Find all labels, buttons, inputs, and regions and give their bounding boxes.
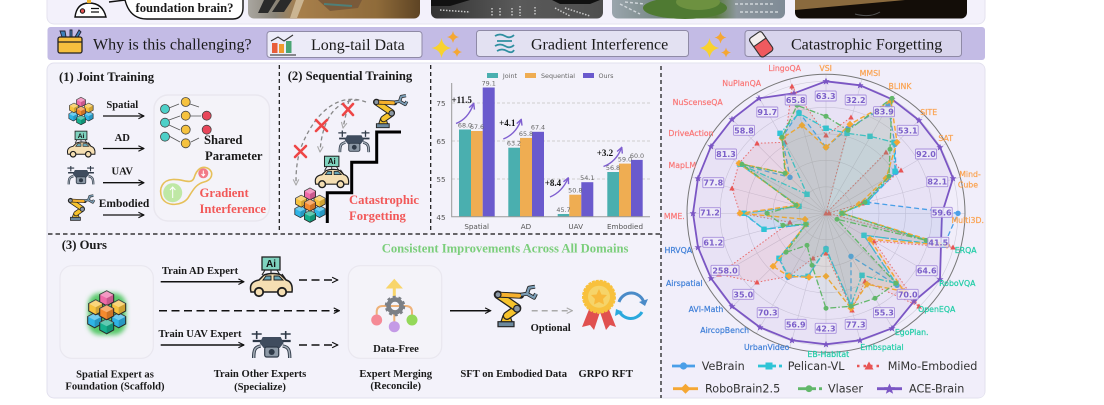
axis labels: VSI: [819, 64, 832, 73]
bar values: 65.8: [519, 130, 533, 138]
arrow: train AD expert: Train AD Expert: [162, 266, 239, 277]
heading: joint training: (1) Joint Training: [59, 70, 155, 84]
value labels: 59.6: [932, 208, 952, 217]
arrow to SFT: [450, 310, 491, 312]
radar legend: VeBrain: [702, 360, 745, 373]
dashed arrow: [299, 279, 338, 281]
optional dashed arrow: [531, 311, 572, 334]
value labels: 83.9: [874, 108, 894, 117]
middle dashed arrow: [159, 310, 339, 312]
bar values: 45.7: [556, 206, 571, 214]
icon: car: [250, 257, 292, 296]
axis labels: [664, 64, 984, 359]
optional dashed arrow: Optional: [531, 323, 571, 334]
step captions: Foundation (Scaffold): [65, 382, 165, 392]
axis labels: AircopBench: [700, 326, 749, 335]
shared parameter box: [154, 95, 270, 221]
axis labels: Embodied: [607, 222, 643, 231]
value labels: 70.0: [898, 290, 918, 299]
speech bubble: [109, 0, 243, 19]
photo: road scene: [431, 0, 603, 18]
step captions: Train Other Experts: [214, 369, 306, 380]
radar grid: [687, 74, 965, 352]
domain inputs: [67, 97, 95, 220]
value labels: [700, 91, 952, 333]
dashed arrow: [299, 344, 338, 346]
bars: [459, 88, 643, 217]
card: catastrophic forgetting: [745, 30, 962, 58]
arrows with domain labels: [99, 100, 150, 215]
radar legend: RoboBrain2.5: [705, 383, 780, 396]
bar values: 67.6: [470, 123, 484, 131]
forgetting arcs: [296, 99, 366, 185]
shared parameter label: Parameter: [205, 149, 263, 163]
value labels: 258.0: [712, 266, 738, 275]
axis labels: DriveAction: [668, 129, 714, 138]
step captions: [65, 369, 633, 393]
radar legend: Pelican-VL: [788, 360, 845, 373]
card: long-tail data: Long-tail Data: [311, 37, 405, 54]
series: Vlaser: [742, 98, 926, 308]
value labels: 58.8: [734, 126, 754, 135]
step captions: GRPO RFT: [578, 369, 633, 380]
bar values: 79.1: [482, 80, 496, 88]
axis labels: 65: [436, 137, 446, 146]
card: gradient interference: [476, 30, 688, 56]
radar legend: MiMo-Embodied: [888, 360, 977, 373]
value labels: 65.8: [786, 96, 806, 105]
value labels: 35.0: [733, 290, 754, 299]
catastrophic forgetting label: Forgetting: [349, 209, 407, 223]
value labels: 70.3: [758, 309, 778, 318]
step captions: (Reconcile): [370, 381, 421, 392]
bar chart: [436, 72, 650, 231]
improvement values: +11.5: [452, 95, 472, 105]
axis labels: Spatial: [464, 222, 489, 231]
bar values: [458, 80, 644, 214]
value labels: 82.1: [927, 178, 948, 187]
expert merging box: [348, 266, 442, 358]
improvement values: +8.4: [545, 178, 562, 188]
card: catastrophic forgetting: Catastrophic Forgetting: [791, 36, 942, 54]
icon: sparkles: [432, 31, 462, 58]
bar values: 59.0: [618, 156, 632, 164]
panel: sequential training: [288, 69, 419, 223]
series: Pelican-VL: [740, 113, 944, 305]
axis labels: LingoQA: [768, 64, 802, 73]
series: MiMo-Embodied: [719, 86, 953, 310]
icon: robot arm: [495, 287, 536, 327]
improvement arrows: [456, 104, 622, 197]
axis labels: MMSI: [860, 69, 880, 78]
axis labels: UrbanVideo: [744, 343, 790, 352]
arrows with domain labels: Embodied: [99, 198, 150, 210]
card: long-tail data: [267, 32, 422, 58]
series: RoboBrain2.5: [739, 101, 947, 308]
value labels: 32.2: [846, 96, 866, 105]
radar panel background: [661, 64, 984, 398]
arrows with domain labels: Spatial: [106, 100, 138, 111]
arrow: train UAV expert: Train UAV Expert: [158, 329, 242, 340]
value labels: 55.3: [874, 309, 894, 318]
heading: ours: (3) Ours: [62, 238, 107, 252]
step captions: (Specialize): [234, 382, 286, 393]
photo: indoor scene: [248, 0, 420, 18]
card: gradient interference: Gradient Interference: [531, 36, 668, 54]
catastrophic forgetting label: Catastrophic: [349, 193, 419, 207]
series: VeBrain: [740, 105, 958, 306]
axis labels: MapLM: [669, 161, 696, 170]
axis labels: Embspatial: [860, 343, 904, 352]
icon: medal: [582, 281, 616, 330]
main panel: [47, 63, 985, 398]
axis labels: 55: [436, 175, 446, 184]
radar chart: [664, 64, 984, 396]
speech bubble: foundation brain?: [136, 1, 234, 15]
gradient interference label: Gradient: [200, 186, 249, 200]
axis labels: OpenEQA: [918, 305, 956, 314]
value labels: 42.3: [816, 324, 836, 333]
improvement values: [452, 95, 614, 188]
axis labels: UAV: [568, 222, 583, 231]
value labels: 56.9: [786, 320, 806, 329]
radar legend: Vlaser: [828, 383, 863, 396]
value labels: 77.8: [703, 179, 724, 188]
gradient interference label: Interference: [200, 202, 266, 216]
icon: toolbox: [58, 30, 82, 53]
bar values: 63.2: [507, 140, 521, 148]
value labels: 63.3: [816, 92, 836, 101]
icon: drone: [252, 331, 291, 358]
bar values: 60.0: [630, 152, 644, 160]
chart legend: Joint: [502, 72, 518, 80]
axis labels: [436, 99, 643, 231]
spatial expert box: [60, 266, 153, 358]
axis labels: AD: [521, 222, 532, 231]
series: ACE-Brain: [693, 81, 953, 344]
improvement values: +4.1: [499, 118, 516, 128]
chart legend: [487, 72, 614, 80]
axis labels: SAT: [938, 134, 953, 143]
heading: sequential training: (2) Sequential Training: [288, 69, 413, 83]
axis labels: BLINK: [889, 82, 912, 91]
expert merging box: Data-Free: [373, 344, 419, 355]
axis labels: Multi3D.: [951, 216, 984, 225]
value labels: 92.0: [916, 150, 936, 159]
challenge bar: [48, 27, 985, 60]
bar values: 56.8: [606, 164, 620, 172]
axis labels: SITE: [920, 108, 937, 117]
bar values: 54.1: [580, 174, 594, 182]
chart legend: Sequential: [541, 72, 575, 80]
axis labels: RoboVQA: [939, 279, 976, 288]
axis labels: ERQA: [955, 246, 977, 255]
arrow: train AD expert: [161, 266, 244, 282]
icon: refresh: [615, 293, 648, 318]
value labels: 61.2: [703, 238, 723, 247]
neural network icon: [160, 98, 211, 148]
arrows with domain labels: UAV: [112, 166, 133, 178]
icon: robot: [75, 0, 106, 17]
axis labels: 45: [436, 213, 446, 222]
axis labels: 75: [436, 99, 446, 108]
gridlines: [452, 103, 650, 179]
bar values: 67.4: [531, 124, 545, 132]
gradient interference icon: [161, 167, 212, 204]
axis labels: AVI-Math: [689, 305, 723, 314]
icon: eraser: [749, 31, 774, 58]
heading: why challenging: Why is this challenging?: [93, 36, 252, 54]
value labels: 53.1: [898, 126, 918, 135]
icon: sparkles: [700, 32, 731, 58]
bar values: 50.8: [568, 186, 582, 194]
step captions: Spatial Expert as: [76, 370, 154, 380]
value labels: 81.3: [716, 150, 736, 159]
callout: consistent improvements: Consistent Improvements Across All Domains: [382, 242, 629, 256]
photo: dark scene: [795, 0, 967, 18]
value labels: 71.2: [700, 209, 720, 218]
value labels: 91.7: [757, 108, 777, 117]
top panel: [47, 0, 985, 24]
step captions: SFT on Embodied Data: [460, 369, 568, 380]
axis labels: Airspatial: [666, 279, 703, 288]
value labels: 77.3: [846, 320, 866, 329]
axis labels: NuPlanQA: [722, 79, 762, 88]
radar legend: ACE-Brain: [909, 383, 964, 396]
radar legend: [672, 360, 977, 396]
step captions: Expert Merging: [359, 369, 433, 380]
value labels: 64.6: [917, 267, 937, 276]
red crosses: [295, 104, 353, 157]
value labels: 41.5: [928, 238, 949, 247]
chart legend: Ours: [598, 72, 614, 80]
photo: aerial city: [612, 0, 785, 19]
axis labels: NuScenseQA: [673, 98, 723, 107]
axis labels: MME.: [664, 212, 685, 221]
staircase: [327, 132, 401, 223]
icon: merging gear: [371, 281, 418, 332]
axis labels: EB-Habitat: [807, 350, 849, 359]
axes: [452, 83, 650, 217]
improvement values: +3.2: [597, 148, 614, 158]
axis labels: Cube: [958, 180, 978, 190]
panel: joint training: [59, 64, 984, 396]
shared parameter label: Shared: [204, 133, 242, 147]
bar values: 68.0: [458, 122, 472, 130]
axis labels: HRVQA: [664, 246, 693, 255]
domain icons on stairs: [295, 96, 407, 222]
panel: ours: [60, 238, 648, 393]
axis labels: Mind-: [959, 170, 981, 179]
axis labels: EgoPlan.: [895, 328, 929, 337]
arrows with domain labels: AD: [115, 133, 130, 144]
arrow: train UAV expert: [158, 329, 244, 345]
